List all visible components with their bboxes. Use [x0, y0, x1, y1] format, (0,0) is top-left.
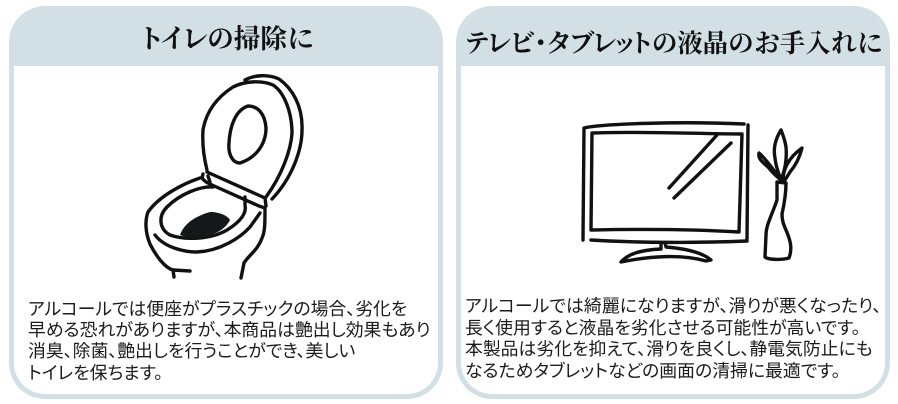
text block: screen care description: 本製品は劣化を抑えて、滑りを良くし、静電気防止にも — [465, 339, 873, 359]
panel: TV and tablet screen care — [456, 6, 890, 399]
text block: toilet description: 消臭、除菌、艶出しを行うことができ、美しい — [28, 341, 355, 361]
panel header: screen care — [456, 6, 890, 66]
panel header: toilet — [9, 6, 443, 66]
text block: screen care description — [465, 296, 881, 381]
icon: toilet bowl opening — [180, 212, 230, 238]
heading: screen care: テレビ・タブレットの液晶のお手入れに — [465, 30, 882, 58]
text block: screen care description: なるためタブレットなどの画面の清掃に最適です。 — [465, 361, 841, 381]
text block: toilet description — [28, 299, 430, 383]
heading: toilet cleaning: トイレの掃除に — [142, 24, 314, 54]
text block: toilet description: トイレを保ちます。 — [28, 363, 163, 383]
text block: toilet description: アルコールでは便座がプラスチックの場合、劣化を — [28, 299, 407, 319]
icon: television with vase — [583, 123, 802, 262]
text block: screen care description: 長く使用すると液晶を劣化させる可能性が高いです。 — [465, 318, 860, 338]
panel: toilet cleaning — [9, 6, 443, 399]
text block: screen care description: アルコールでは綺麗になりますが、滑りが悪くなったり、 — [465, 296, 881, 316]
icon: toilet with open lid — [146, 76, 302, 278]
text block: toilet description: 早める恐れがありますが、本商品は艶出し効果もあり — [28, 320, 430, 340]
